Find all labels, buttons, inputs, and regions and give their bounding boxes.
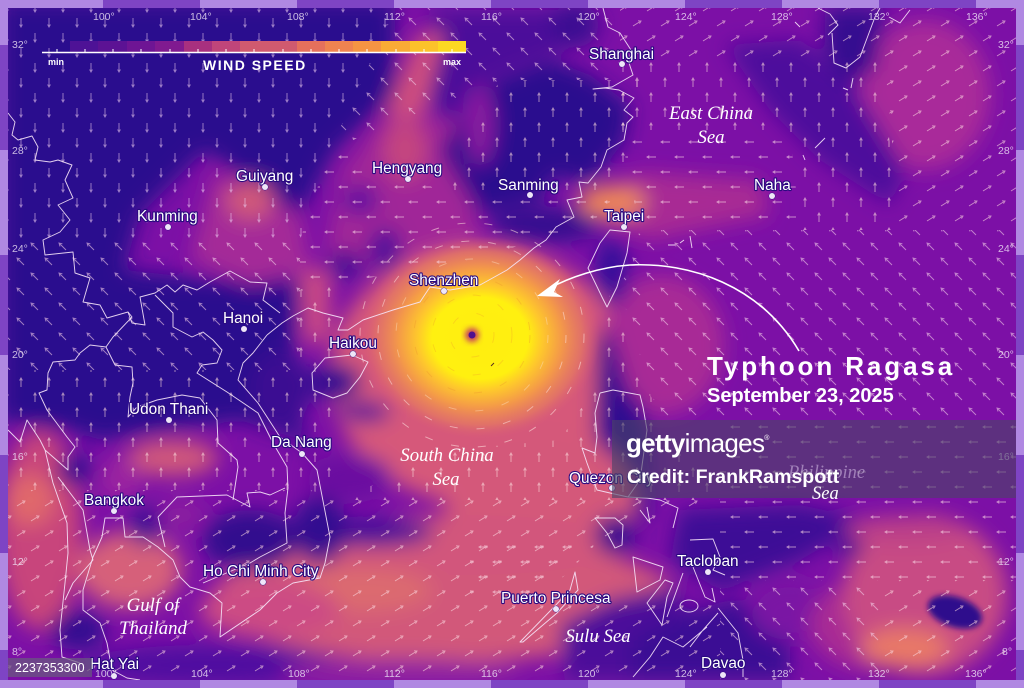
- arrow to typhoon: [537, 265, 799, 351]
- graticule labels: 28°: [12, 145, 28, 157]
- graticule labels: 128°: [771, 668, 793, 680]
- city labels: Udon Thani: [129, 401, 208, 418]
- city labels: Ho Chi Minh City: [203, 563, 319, 580]
- graticule labels: 104°: [190, 11, 212, 23]
- city labels: Tacloban: [677, 553, 739, 570]
- city labels: Hengyang: [372, 160, 442, 177]
- wind speed legend: [42, 41, 466, 73]
- graticule labels: 12°: [998, 556, 1014, 568]
- graticule labels: 32°: [998, 39, 1014, 51]
- graticule labels: 20°: [12, 349, 28, 361]
- city labels: Da Nang: [271, 434, 332, 451]
- graticule labels: 128°: [771, 11, 793, 23]
- sea labels: Sea: [697, 127, 725, 148]
- graticule labels: 124°: [675, 11, 697, 23]
- sea labels: Gulf of: [127, 595, 182, 616]
- sea labels: Sulu Sea: [565, 626, 631, 647]
- city labels: Taipei: [604, 208, 644, 225]
- wind speed legend: WIND SPEED: [203, 57, 307, 73]
- watermark band: Sea: [812, 484, 839, 504]
- city labels: Shenzhen: [409, 272, 478, 289]
- graticule labels: 32°: [12, 39, 28, 51]
- graticule labels: 100°: [93, 11, 115, 23]
- city labels: Sanming: [498, 177, 559, 194]
- graticule labels: 24°: [998, 243, 1014, 255]
- sea labels: East China: [668, 103, 753, 124]
- wind speed legend: max: [443, 57, 461, 67]
- graticule labels: 20°: [998, 349, 1014, 361]
- sea labels: Sea: [432, 469, 460, 490]
- image ID tag: [0, 658, 92, 677]
- graticule labels: 136°: [966, 11, 988, 23]
- watermark band: ®: [764, 434, 770, 442]
- typhoon title: September 23, 2025: [707, 385, 894, 407]
- city labels: Quezon City: [569, 470, 654, 487]
- graticule labels: 108°: [287, 11, 309, 23]
- sea labels: Thailand: [119, 618, 188, 639]
- city labels: Kunming: [137, 208, 198, 225]
- graticule labels: 132°: [868, 11, 890, 23]
- graticule labels: 132°: [868, 668, 890, 680]
- graticule labels: 108°: [288, 668, 310, 680]
- watermark band: Philippine: [787, 463, 865, 483]
- city labels: Shanghai: [589, 46, 654, 63]
- graticule labels: 8°: [1002, 646, 1012, 658]
- city labels: Davao: [701, 655, 746, 672]
- sea labels: [119, 103, 753, 647]
- graticule labels: 116°: [481, 668, 502, 680]
- graticule labels: 104°: [191, 668, 213, 680]
- city labels: Puerto Princesa: [501, 590, 611, 607]
- image ID tag: 2237353300: [15, 661, 85, 675]
- city labels: Bangkok: [84, 492, 144, 509]
- city labels: Hat Yai: [90, 656, 139, 673]
- graticule labels: 124°: [675, 668, 697, 680]
- typhoon core: [360, 236, 600, 440]
- city labels: Naha: [754, 177, 791, 194]
- city labels: Haikou: [329, 335, 377, 352]
- typhoon title: [707, 351, 955, 407]
- sea labels: South China: [400, 445, 494, 466]
- graticule labels: 12°: [12, 556, 28, 568]
- graticule labels: 136°: [965, 668, 987, 680]
- graticule labels: 24°: [12, 243, 28, 255]
- graticule labels: 100°: [95, 668, 117, 680]
- graticule labels: 112°: [384, 11, 405, 23]
- graticule labels: 8°: [12, 646, 22, 658]
- graticule labels: 120°: [578, 668, 600, 680]
- graticule labels: 28°: [998, 145, 1014, 157]
- watermark band: [612, 420, 1016, 504]
- city labels: Guiyang: [236, 168, 293, 185]
- graticule labels: 16°: [998, 451, 1014, 463]
- watermark band: gettyimages: [626, 428, 764, 458]
- city labels: Hanoi: [223, 310, 263, 327]
- wind speed legend: min: [48, 57, 64, 67]
- graticule labels: 112°: [384, 668, 405, 680]
- graticule labels: 16°: [12, 451, 28, 463]
- city labels: [84, 46, 791, 679]
- graticule labels: 116°: [481, 11, 502, 23]
- typhoon title: Typhoon Ragasa: [707, 351, 955, 381]
- watermark band: Credit: FrankRamspott: [627, 466, 840, 488]
- graticule labels: 120°: [578, 11, 600, 23]
